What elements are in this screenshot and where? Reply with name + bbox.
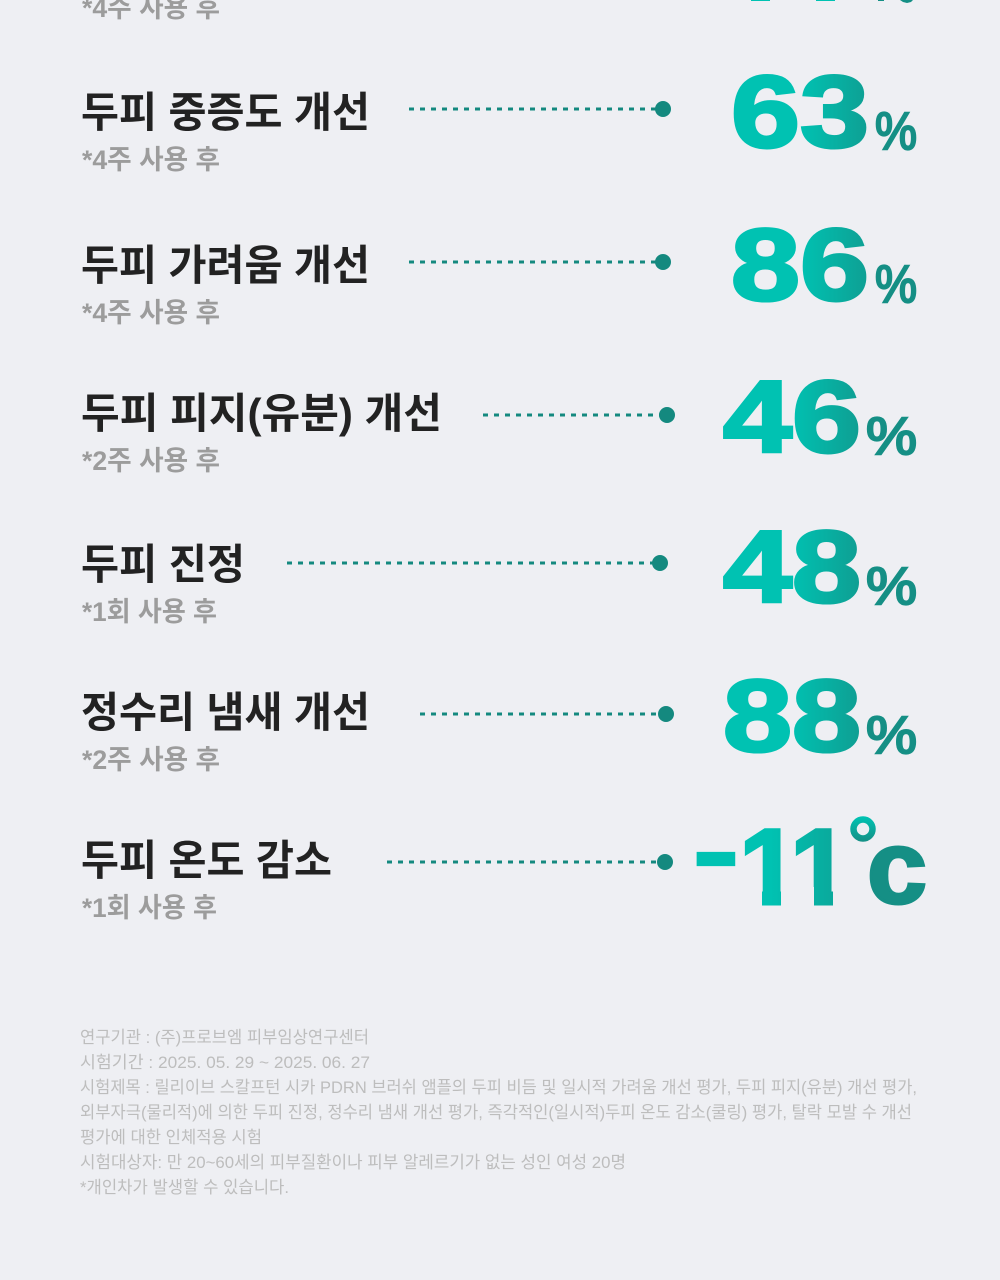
subtitle: *4주 사용 후 — [82, 145, 220, 175]
digit one: 1 — [739, 806, 799, 927]
footnote: 시험기간 : 2025. 05. 29 ~ 2025. 06. 27 — [80, 1053, 370, 1072]
dot — [655, 254, 671, 270]
row: 두피 온도 감소 -11°c — [82, 816, 926, 920]
number: 88 — [723, 659, 861, 773]
dot — [655, 101, 671, 117]
percent: % — [866, 407, 917, 466]
subtitle: *2주 사용 후 — [82, 446, 220, 476]
subtitle: *4주 사용 후 — [82, 298, 220, 328]
number: 46 — [723, 360, 861, 474]
row: 두피 가려움 개선 86% — [81, 208, 917, 328]
dot — [659, 407, 675, 423]
percent: % — [875, 102, 917, 161]
heading: 두피 피지(유분) 개선 — [81, 390, 442, 437]
heading: 두피 중증도 개선 — [81, 89, 370, 136]
number: 86 — [731, 208, 869, 322]
percent: % — [875, 255, 917, 314]
dot — [657, 854, 673, 870]
footnote: *개인차가 발생할 수 있습니다. — [80, 1178, 289, 1197]
footnote — [80, 1028, 917, 1197]
heading: 두피 진정 — [81, 541, 245, 588]
subtitle: *1회 사용 후 — [82, 893, 217, 923]
footnote: 시험제목 : 릴리이브 스칼프턴 시카 PDRN 브러쉬 앰플의 두피 비듬 및 일시적 가려움 개선 평가, 두피 피지(유분) 개선 평가, — [80, 1078, 917, 1097]
number: 63 — [731, 55, 869, 169]
digit one: 1 — [790, 806, 850, 927]
number: 48 — [723, 510, 861, 624]
footnote: 시험대상자: 만 20~60세의 피부질환이나 피부 알레르기가 없는 성인 여성 20명 — [80, 1153, 626, 1172]
dot — [652, 555, 668, 571]
heading: 두피 가려움 개선 — [81, 242, 370, 289]
dotted line — [420, 712, 659, 716]
dotted line — [409, 260, 656, 264]
heading: 두피 온도 감소 — [81, 837, 332, 884]
footnote: 연구기관 : (주)프로브엠 피부임상연구센터 — [80, 1028, 369, 1047]
dotted line — [483, 414, 660, 416]
heading: 정수리 냄새 개선 — [81, 689, 370, 736]
footnote: 외부자극(물리적)에 의한 두피 진정, 정수리 냄새 개선 평가, 즉각적인(일시적)두피 온도 감소(쿨링) 평가, 탈락 모발 수 개선 — [80, 1103, 912, 1122]
footnote: 평가에 대한 인체적용 시험 — [80, 1128, 262, 1147]
percent: % — [866, 557, 917, 616]
subtitle: *2주 사용 후 — [82, 745, 220, 775]
cut-off percent — [878, 0, 913, 3]
dotted line — [287, 562, 653, 564]
row: 정수리 냄새 개선 88% — [81, 659, 917, 775]
dotted line — [409, 108, 656, 110]
subtitle: *1회 사용 후 — [82, 597, 217, 627]
degree ring — [854, 820, 872, 838]
minus sign: - — [692, 789, 740, 910]
row: 두피 중증도 개선 63% — [81, 55, 917, 175]
dot — [658, 706, 674, 722]
row: 두피 진정 48% — [81, 510, 917, 627]
letter c: c — [867, 810, 927, 926]
dotted line — [387, 860, 658, 864]
cut-off number stems — [751, 0, 835, 1]
percent: % — [866, 706, 917, 765]
row: cut-off previous item — [82, 0, 913, 23]
row: 두피 피지(유분) 개선 46% — [81, 360, 917, 476]
